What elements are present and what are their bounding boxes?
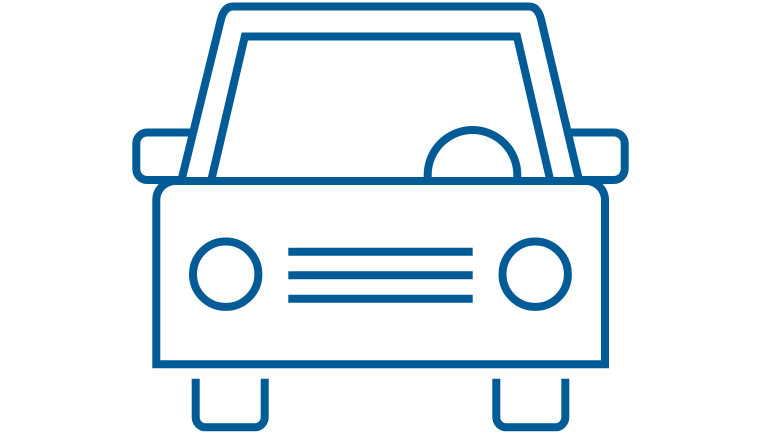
left headlight <box>193 242 258 307</box>
left side mirror <box>136 132 191 180</box>
steering wheel <box>428 130 517 181</box>
right wheel <box>496 379 565 427</box>
left wheel <box>196 379 265 427</box>
car body <box>156 181 605 364</box>
right side mirror <box>571 132 625 180</box>
right headlight <box>502 242 568 307</box>
front grille <box>288 252 473 299</box>
windshield <box>211 36 550 180</box>
car roof outline <box>182 6 579 180</box>
